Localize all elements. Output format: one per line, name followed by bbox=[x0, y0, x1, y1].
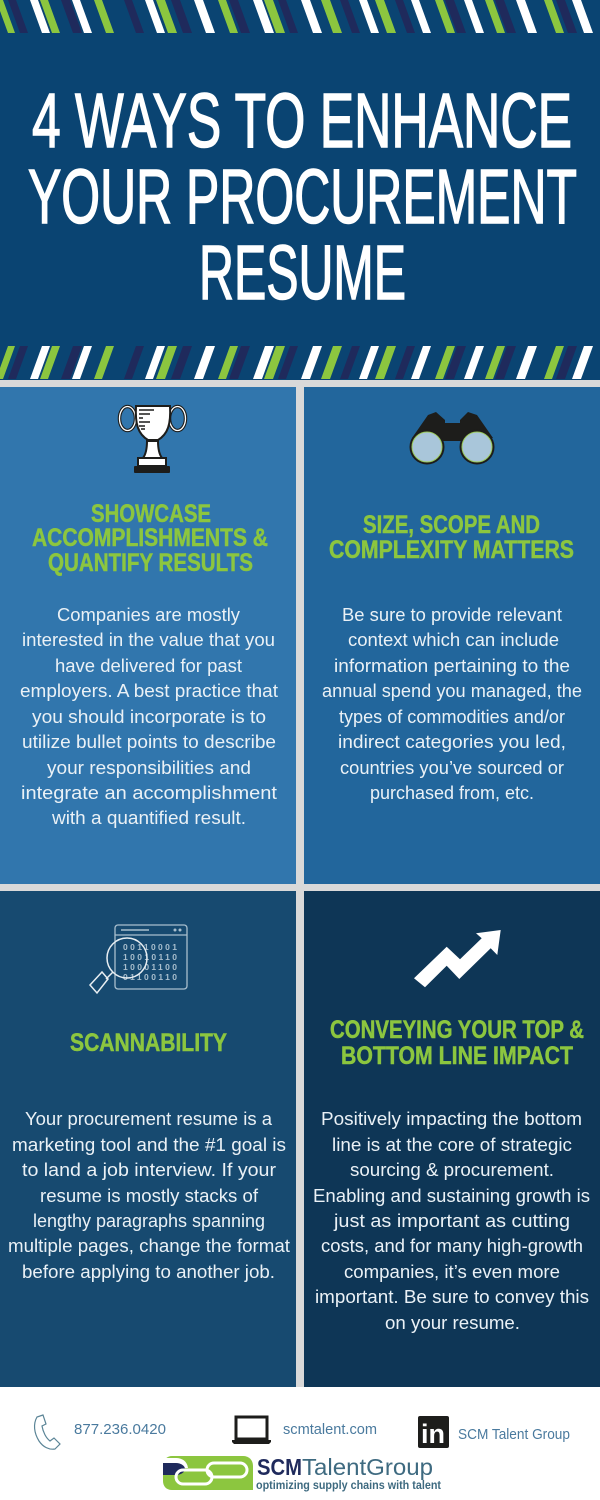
icon: code window with magnifier: 10010110 bbox=[123, 952, 177, 962]
title bbox=[28, 78, 577, 316]
text block: companies, it’s even more bbox=[344, 1262, 560, 1282]
text block: just as important as cutting bbox=[333, 1211, 570, 1231]
footer: contact row bbox=[35, 1415, 570, 1449]
text block: Companies are mostly bbox=[57, 605, 240, 625]
text block: annual spend you managed, the bbox=[322, 681, 582, 701]
text block: utilize bullet points to describe bbox=[22, 732, 276, 752]
icon: code window with magnifier: 01100110 bbox=[123, 972, 177, 982]
website: scmtalent.com bbox=[283, 1421, 377, 1438]
text block: types of commodities and/or bbox=[339, 707, 565, 727]
text block: to land a job interview. If your bbox=[22, 1160, 276, 1180]
text block: context which can include bbox=[348, 630, 559, 650]
text block: integrate an accomplishment bbox=[21, 783, 277, 803]
heading: SHOWCASE bbox=[91, 500, 211, 528]
icon: rising arrow bbox=[414, 930, 501, 987]
text block bbox=[322, 605, 582, 803]
heading: SIZE, SCOPE AND bbox=[363, 511, 540, 539]
title: RESUME bbox=[199, 230, 406, 316]
logo wordmark: TalentGroup bbox=[302, 1454, 433, 1480]
text block: purchased from, etc. bbox=[370, 783, 534, 803]
text block: line is at the core of strategic bbox=[332, 1135, 572, 1155]
panel: scannability bbox=[0, 891, 296, 1387]
text block: interested in the value that you bbox=[22, 630, 275, 650]
heading bbox=[329, 511, 574, 564]
text block: employers. A best practice that bbox=[20, 681, 278, 701]
icon: linkedin: in bbox=[421, 1419, 445, 1449]
text block: Enabling and sustaining growth is bbox=[313, 1186, 590, 1206]
linkedin name: SCM Talent Group bbox=[458, 1426, 570, 1443]
text block: countries you’ve sourced or bbox=[340, 758, 564, 778]
text block: have delivered for past bbox=[55, 656, 242, 676]
text block: your responsibilities and bbox=[47, 758, 251, 778]
text block bbox=[313, 1109, 590, 1333]
bottom stripes bbox=[0, 346, 600, 379]
heading: SCANNABILITY bbox=[70, 1029, 227, 1057]
icon: phone bbox=[35, 1415, 60, 1449]
heading: QUANTIFY RESULTS bbox=[48, 549, 253, 577]
logo wordmark: optimizing supply chains with talent bbox=[256, 1480, 441, 1492]
panel: showcase accomplishments bbox=[0, 387, 296, 884]
icon: code window with magnifier bbox=[90, 925, 187, 993]
panel: top and bottom line impact bbox=[304, 891, 600, 1387]
text block: information pertaining to the bbox=[334, 656, 570, 676]
text block: you should incorporate is to bbox=[32, 707, 266, 727]
icon: code window with magnifier: 00110001 bbox=[123, 942, 177, 952]
text block: Positively impacting the bottom bbox=[321, 1109, 582, 1129]
text block: with a quantified result. bbox=[51, 808, 246, 828]
text block: indirect categories you led, bbox=[338, 732, 566, 752]
logo chain mark bbox=[163, 1456, 253, 1490]
text block: lengthy paragraphs spanning bbox=[33, 1211, 265, 1231]
text block: marketing tool and the #1 goal is bbox=[12, 1135, 286, 1155]
text block: before applying to another job. bbox=[22, 1262, 275, 1282]
heading: ACCOMPLISHMENTS & bbox=[32, 524, 268, 552]
icon: binoculars bbox=[410, 412, 494, 464]
top stripes bbox=[0, 0, 600, 33]
text block: resume is mostly stacks of bbox=[40, 1186, 259, 1206]
icon: laptop bbox=[232, 1417, 271, 1444]
text block: multiple pages, change the format bbox=[8, 1236, 290, 1256]
text block: on your resume. bbox=[385, 1313, 520, 1333]
heading bbox=[32, 500, 268, 577]
header panel bbox=[0, 0, 600, 380]
footer: logo bbox=[163, 1454, 441, 1492]
logo wordmark: SCM bbox=[257, 1454, 302, 1480]
text block: Be sure to provide relevant bbox=[342, 605, 562, 625]
icon: code window with magnifier: 10001100 bbox=[123, 962, 177, 972]
logo wordmark bbox=[256, 1454, 441, 1492]
text block: sourcing & procurement. bbox=[350, 1160, 554, 1180]
text block bbox=[20, 605, 278, 828]
phone number: 877.236.0420 bbox=[74, 1421, 166, 1438]
panel: size, scope and complexity bbox=[304, 387, 600, 884]
text block: Your procurement resume is a bbox=[25, 1109, 273, 1129]
text block: costs, and for many high-growth bbox=[321, 1236, 583, 1256]
text block: important. Be sure to convey this bbox=[315, 1287, 589, 1307]
icon: trophy bbox=[120, 406, 186, 473]
heading bbox=[330, 1016, 584, 1070]
text block bbox=[8, 1109, 290, 1282]
